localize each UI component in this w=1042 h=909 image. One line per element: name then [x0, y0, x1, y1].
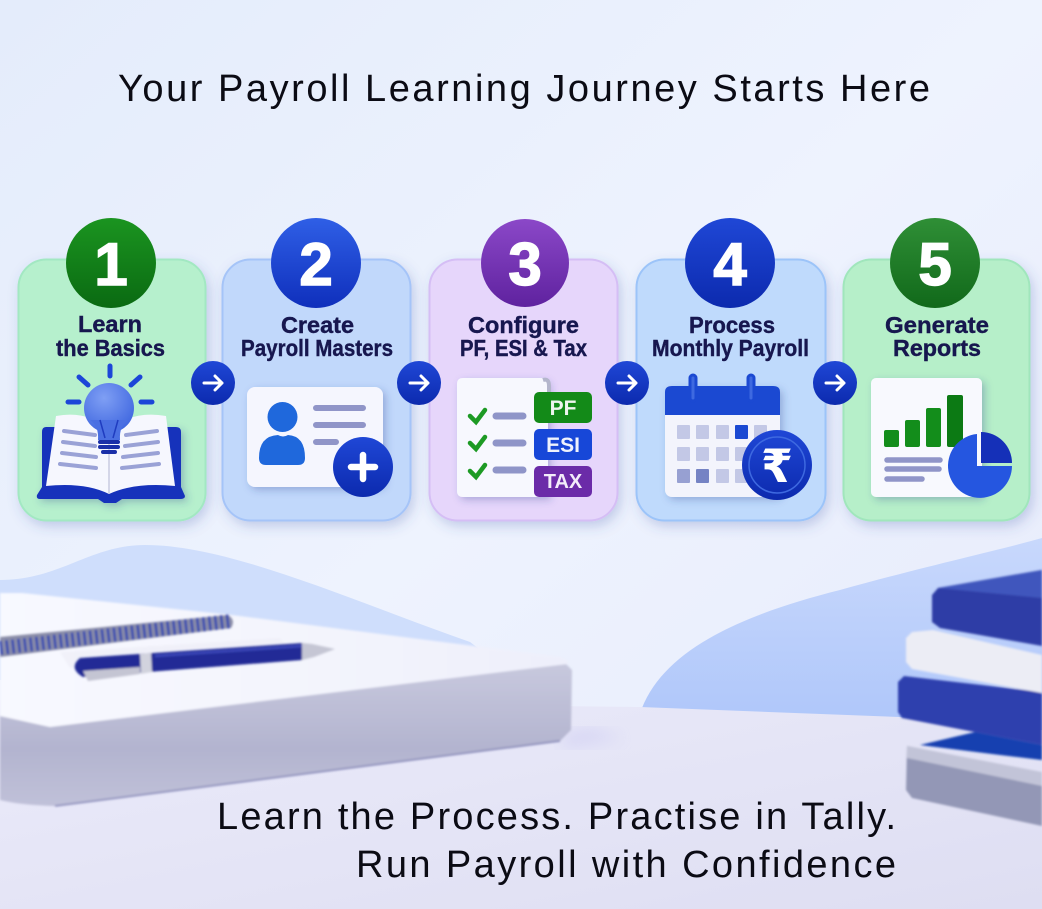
badge: number 1: [66, 218, 156, 308]
arrow: step 1 to 2: [191, 361, 235, 405]
step 5 heading: [885, 312, 989, 361]
panel: step 1 learn the basics: [18, 218, 206, 520]
book: blue top: [932, 570, 1042, 646]
badge: number 4: [685, 218, 775, 308]
icon: checklist with PF ESI TAX tags: PF: [550, 397, 577, 420]
icon: checklist with PF ESI TAX tags: TAX: [544, 471, 583, 493]
arrow: step 4 to 5: [813, 361, 857, 405]
panel: step 5 generate reports: [844, 218, 1030, 520]
badge: number 5: 5: [918, 231, 952, 298]
badge: number 5: [890, 218, 980, 308]
step 1 heading: Learn: [78, 311, 142, 337]
book: grey bottom: [906, 746, 1042, 826]
step 4 heading: Monthly Payroll: [652, 335, 809, 361]
tagline: Run Payroll with Confidence: [356, 844, 896, 886]
icon: employee card with plus: [247, 387, 393, 497]
step 3 heading: [460, 312, 587, 361]
step 3 heading: PF, ESI & Tax: [460, 335, 587, 361]
icon: open book with light bulb: [37, 366, 185, 503]
tagline: Learn the Process. Practise in Tally.: [217, 796, 896, 838]
panel: step 2 create payroll masters: [222, 218, 410, 520]
panel: step 4 process monthly payroll: [636, 218, 826, 520]
step 2 heading: Create: [281, 312, 354, 338]
pen: [75, 643, 335, 681]
tagline: [217, 796, 896, 886]
badge: number 3: [481, 219, 569, 307]
icon: report with bars and pie chart: [871, 378, 1012, 498]
badge: number 2: 2: [299, 231, 333, 298]
step 1 heading: [56, 311, 165, 361]
icon: calendar with rupee coin: [665, 378, 812, 500]
background hills: [0, 538, 1042, 730]
book: white: [906, 630, 1042, 693]
step 4 heading: Process: [689, 312, 775, 338]
icon: calendar with rupee coin: ₹: [761, 439, 793, 493]
book: blue: [898, 676, 1042, 745]
badge: number 1: 1: [94, 231, 128, 298]
step 5 heading: Reports: [893, 335, 981, 361]
spiral notebook binding: [0, 615, 285, 668]
icon: checklist with PF ESI TAX tags: ESI: [546, 434, 580, 457]
icon: checklist with PF ESI TAX tags: [457, 378, 592, 497]
title: Your Payroll Learning Journey Starts Here: [118, 68, 930, 110]
badge: number 3: 3: [508, 231, 542, 298]
badge: number 2: [271, 218, 361, 308]
stack of books: [898, 570, 1042, 826]
step 1 heading: the Basics: [56, 335, 165, 361]
step 5 heading: Generate: [885, 312, 989, 338]
book shadow band: [920, 732, 1042, 760]
panel: step 3 configure pf esi tax: [430, 219, 618, 520]
badge: number 4: 4: [713, 231, 747, 298]
arrow: step 3 to 4: [605, 361, 649, 405]
table surface: [0, 700, 1042, 909]
step 2 heading: Payroll Masters: [241, 335, 393, 361]
white slab with notebook and pen: [0, 593, 625, 806]
step 4 heading: [652, 312, 809, 361]
step 2 heading: [241, 312, 393, 361]
arrow: step 2 to 3: [397, 361, 441, 405]
step 3 heading: Configure: [468, 312, 579, 338]
